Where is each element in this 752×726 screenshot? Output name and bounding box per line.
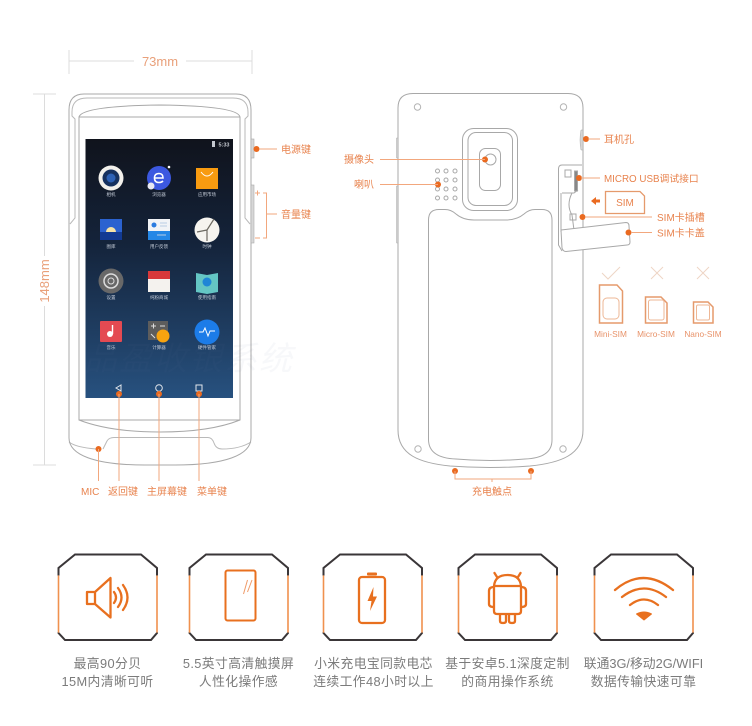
callout: volume key: 音量键 bbox=[281, 208, 311, 221]
SIM cover flap bbox=[561, 222, 630, 252]
app: music bbox=[100, 321, 122, 351]
app: clock bbox=[194, 218, 220, 250]
app: guide: 使用指南 bbox=[198, 294, 216, 301]
app: market: 应用市场 bbox=[198, 191, 216, 198]
SIM type: Mini-SIM: Mini-SIM bbox=[594, 329, 627, 339]
app: shop bbox=[148, 271, 170, 301]
icon: battery bbox=[359, 572, 385, 623]
caption: 人性化操作感 bbox=[199, 674, 278, 689]
inner body contour bbox=[69, 98, 251, 449]
callout: MIC bbox=[81, 446, 102, 498]
caption bbox=[61, 656, 154, 689]
icon frame bbox=[58, 554, 157, 640]
dimension: width 73mm bbox=[69, 50, 252, 74]
SIM type: Mini-SIM bbox=[594, 267, 627, 339]
back view of device bbox=[396, 94, 630, 468]
feature: network bbox=[584, 554, 703, 689]
callout: menu key: 菜单键 bbox=[197, 485, 227, 498]
feature: battery bbox=[313, 554, 434, 689]
callout: micro USB port: MICRO USB调试接口 bbox=[604, 172, 699, 185]
caption: 数据传输快速可靠 bbox=[591, 674, 696, 689]
callout: SIM slot bbox=[580, 211, 705, 224]
SIM type: Nano-SIM bbox=[684, 267, 722, 339]
app: camera bbox=[98, 166, 124, 198]
app: clock: 时钟 bbox=[202, 243, 212, 250]
app: calculator: 计算器 bbox=[152, 344, 166, 351]
device body outline bbox=[69, 94, 251, 465]
icon: speaker bbox=[87, 578, 128, 618]
icon frame bbox=[324, 554, 422, 640]
callout: home key bbox=[147, 391, 187, 498]
app: feedback: 用户反馈 bbox=[150, 243, 168, 250]
caption bbox=[313, 656, 434, 689]
front view of device bbox=[69, 94, 297, 465]
icon frame bbox=[594, 554, 693, 640]
icon frame bbox=[458, 554, 557, 640]
caption: 最高90分贝 bbox=[74, 656, 141, 671]
app: camera: 相机 bbox=[106, 191, 116, 198]
callout: charging contacts bbox=[452, 468, 534, 498]
callout: power key: 电源键 bbox=[281, 143, 311, 156]
back side buttons bbox=[396, 130, 583, 243]
callout: SIM cover bbox=[626, 226, 705, 240]
SIM card insertion graphic: SIM bbox=[616, 198, 634, 209]
callout: SIM slot: SIM卡插槽 bbox=[657, 211, 705, 224]
app: hardware manager bbox=[194, 320, 220, 351]
callout: back key: 返回键 bbox=[108, 485, 138, 498]
SIM type: Micro-SIM bbox=[637, 267, 675, 339]
app: gallery: 图库 bbox=[106, 243, 116, 250]
status bar: 5:33 bbox=[218, 142, 230, 148]
callout: home key: 主屏幕键 bbox=[147, 485, 187, 498]
callout: speaker bbox=[354, 179, 441, 191]
callout: power key bbox=[254, 143, 311, 156]
caption bbox=[584, 656, 703, 689]
app: settings: 设置 bbox=[106, 294, 116, 301]
callout: volume key bbox=[255, 190, 311, 238]
icon: touch screen bbox=[226, 570, 256, 620]
dimension: height 148mm bbox=[33, 94, 56, 465]
callout: speaker: 喇叭 bbox=[354, 179, 374, 191]
caption: 的商用操作系统 bbox=[461, 674, 554, 689]
caption bbox=[183, 656, 294, 689]
callout: camera: 摄像头 bbox=[344, 153, 374, 166]
app: browser bbox=[147, 166, 171, 198]
SIM type: Nano-SIM: Nano-SIM bbox=[684, 329, 722, 339]
caption bbox=[445, 656, 570, 689]
app: feedback bbox=[148, 219, 170, 250]
feature: touch screen bbox=[183, 554, 294, 689]
dimension: height 148mm: 148mm bbox=[37, 259, 52, 303]
side buttons bbox=[251, 139, 254, 158]
app: hardware manager: 硬件管家 bbox=[198, 344, 216, 351]
SIM card insertion graphic bbox=[591, 192, 644, 214]
callout: menu key bbox=[196, 391, 227, 498]
feature: android bbox=[445, 554, 570, 689]
app: guide bbox=[196, 273, 218, 301]
app: gallery bbox=[100, 219, 122, 250]
icon: wifi bbox=[615, 578, 673, 620]
SIM compartment bbox=[558, 165, 582, 251]
phone screen bbox=[86, 139, 233, 398]
callout: camera bbox=[344, 153, 488, 166]
caption: 连续工作48小时以上 bbox=[313, 674, 434, 689]
callout: charging contacts: 充电触点 bbox=[472, 485, 512, 498]
feature: speaker bbox=[58, 554, 157, 689]
app: music: 音乐 bbox=[106, 344, 116, 351]
app: market bbox=[196, 168, 218, 198]
camera module bbox=[462, 128, 518, 210]
caption: 联通3G/移动2G/WIFI bbox=[584, 656, 703, 671]
callout: MIC: MIC bbox=[81, 487, 99, 498]
callout: earphone jack bbox=[583, 133, 634, 146]
caption: 15M内清晰可听 bbox=[61, 674, 154, 689]
back body outline bbox=[398, 94, 583, 468]
screw holes bbox=[414, 104, 567, 452]
icon frame bbox=[190, 554, 288, 640]
callout: micro USB port bbox=[576, 172, 699, 185]
app: calculator bbox=[148, 321, 170, 351]
speaker holes bbox=[436, 169, 457, 200]
app: browser: 浏览器 bbox=[152, 191, 166, 198]
caption: 基于安卓5.1深度定制 bbox=[445, 656, 570, 671]
callout: SIM cover: SIM卡卡盖 bbox=[657, 226, 705, 240]
callout: back key bbox=[108, 391, 138, 498]
caption: 5.5英寸高清触摸屏 bbox=[183, 656, 294, 671]
dimension: width 73mm: 73mm bbox=[142, 54, 178, 69]
battery cover bbox=[428, 210, 552, 460]
icon: android robot bbox=[489, 573, 526, 623]
caption: 小米充电宝同款电芯 bbox=[314, 656, 433, 671]
callout: earphone jack: 耳机孔 bbox=[604, 133, 634, 146]
watermark: 品盈收银系统 bbox=[84, 340, 297, 377]
SIM type: Micro-SIM: Micro-SIM bbox=[637, 329, 675, 339]
screen bezel bbox=[79, 105, 240, 432]
navigation icons bbox=[116, 385, 202, 391]
app: settings bbox=[98, 268, 124, 301]
app: shop: 纯粉商城 bbox=[150, 294, 168, 301]
